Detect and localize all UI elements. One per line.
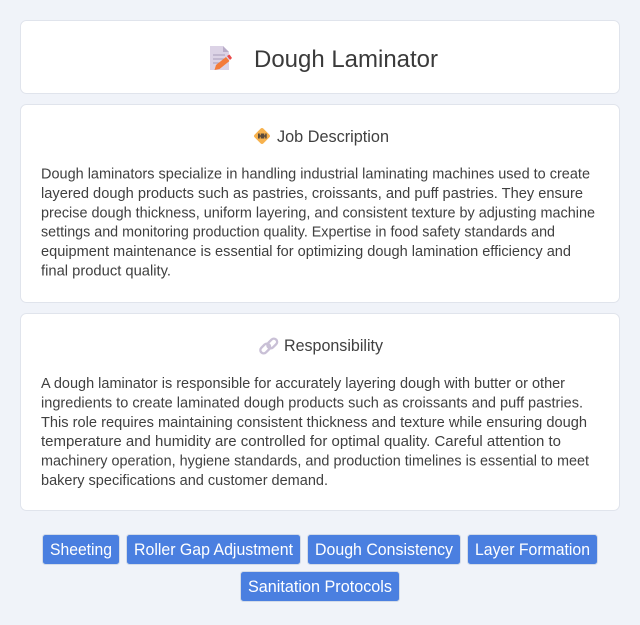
icon: document with pencil [210, 46, 232, 70]
tag: Sanitation Protocols: Sanitation Protocols [248, 578, 392, 596]
heading: responsibility: Responsibility [284, 337, 384, 355]
tag: Roller Gap Adjustment [126, 534, 300, 564]
text block: job description: Dough laminators specialize in handling industrial laminating machines used to create [41, 166, 590, 182]
tag: Sheeting: Sheeting [50, 541, 112, 559]
text block: job description: settings and monitoring production quality. Expertise in food safety standards and [41, 224, 555, 240]
tag: Layer Formation: Layer Formation [475, 541, 590, 559]
tag: Dough Consistency [308, 534, 460, 564]
panel: responsibility [20, 314, 620, 510]
icon: job description diamond [253, 127, 271, 145]
text block: responsibility [41, 376, 589, 489]
tag: Dough Consistency: Dough Consistency [315, 541, 454, 559]
text block: responsibility: machinery operation, hygiene standards, and production timelines is essential to meet [41, 454, 589, 470]
heading: job description: Job Description [277, 128, 389, 146]
panel: job description [20, 104, 620, 302]
icon: chain link [259, 337, 278, 355]
text block: job description: layered dough products such as pastries, croissants, and puff pastries. They ensure [41, 186, 583, 202]
tag: Sheeting [42, 534, 120, 564]
text block: job description: precise dough thickness, uniform layering, and consistent texture by adjusting machine [41, 206, 595, 222]
panel: title [20, 20, 620, 94]
text block: responsibility: temperature and humidity are controlled for optimal quality. Careful attention to [41, 434, 561, 450]
tag: Roller Gap Adjustment: Roller Gap Adjustment [134, 541, 293, 559]
tag: Layer Formation [468, 534, 598, 564]
title text: Dough Laminator [254, 46, 438, 73]
text block: responsibility: ingredients to create laminated dough products such as croissants and puff pastries. [41, 396, 583, 412]
text block: job description: equipment maintenance is essential for optimizing dough lamination efficiency and [41, 244, 571, 260]
tag: Sanitation Protocols [240, 572, 400, 602]
text block: responsibility: A dough laminator is responsible for accurately layering dough with butter or other [41, 376, 565, 392]
text block: responsibility: bakery specifications and customer demand. [41, 473, 328, 489]
text block: responsibility: This role requires maintaining consistent thickness and texture while ensuring dough [41, 415, 587, 431]
text block: job description [41, 166, 595, 280]
text block: job description: final product quality. [41, 264, 171, 280]
